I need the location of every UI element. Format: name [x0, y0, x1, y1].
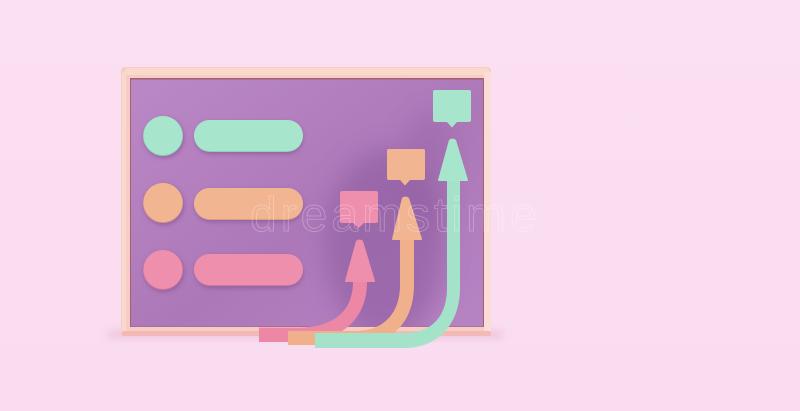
pink arrow [259, 240, 375, 342]
row 3: pink circle and pill [143, 250, 303, 292]
green arrow [315, 138, 468, 348]
board frame [121, 67, 491, 336]
floor shadow [108, 330, 503, 339]
row 2: orange circle and pill [143, 183, 303, 225]
row 1: green circle and pill [143, 116, 303, 158]
green speech bubble [433, 90, 471, 128]
orange arrow [288, 196, 422, 345]
orange speech bubble [387, 149, 425, 186]
illustration: presentation board with rising arrows [106, 67, 506, 348]
pink speech bubble [340, 191, 378, 228]
board purple panel [130, 78, 484, 340]
watermark: dreamstime [250, 189, 541, 242]
